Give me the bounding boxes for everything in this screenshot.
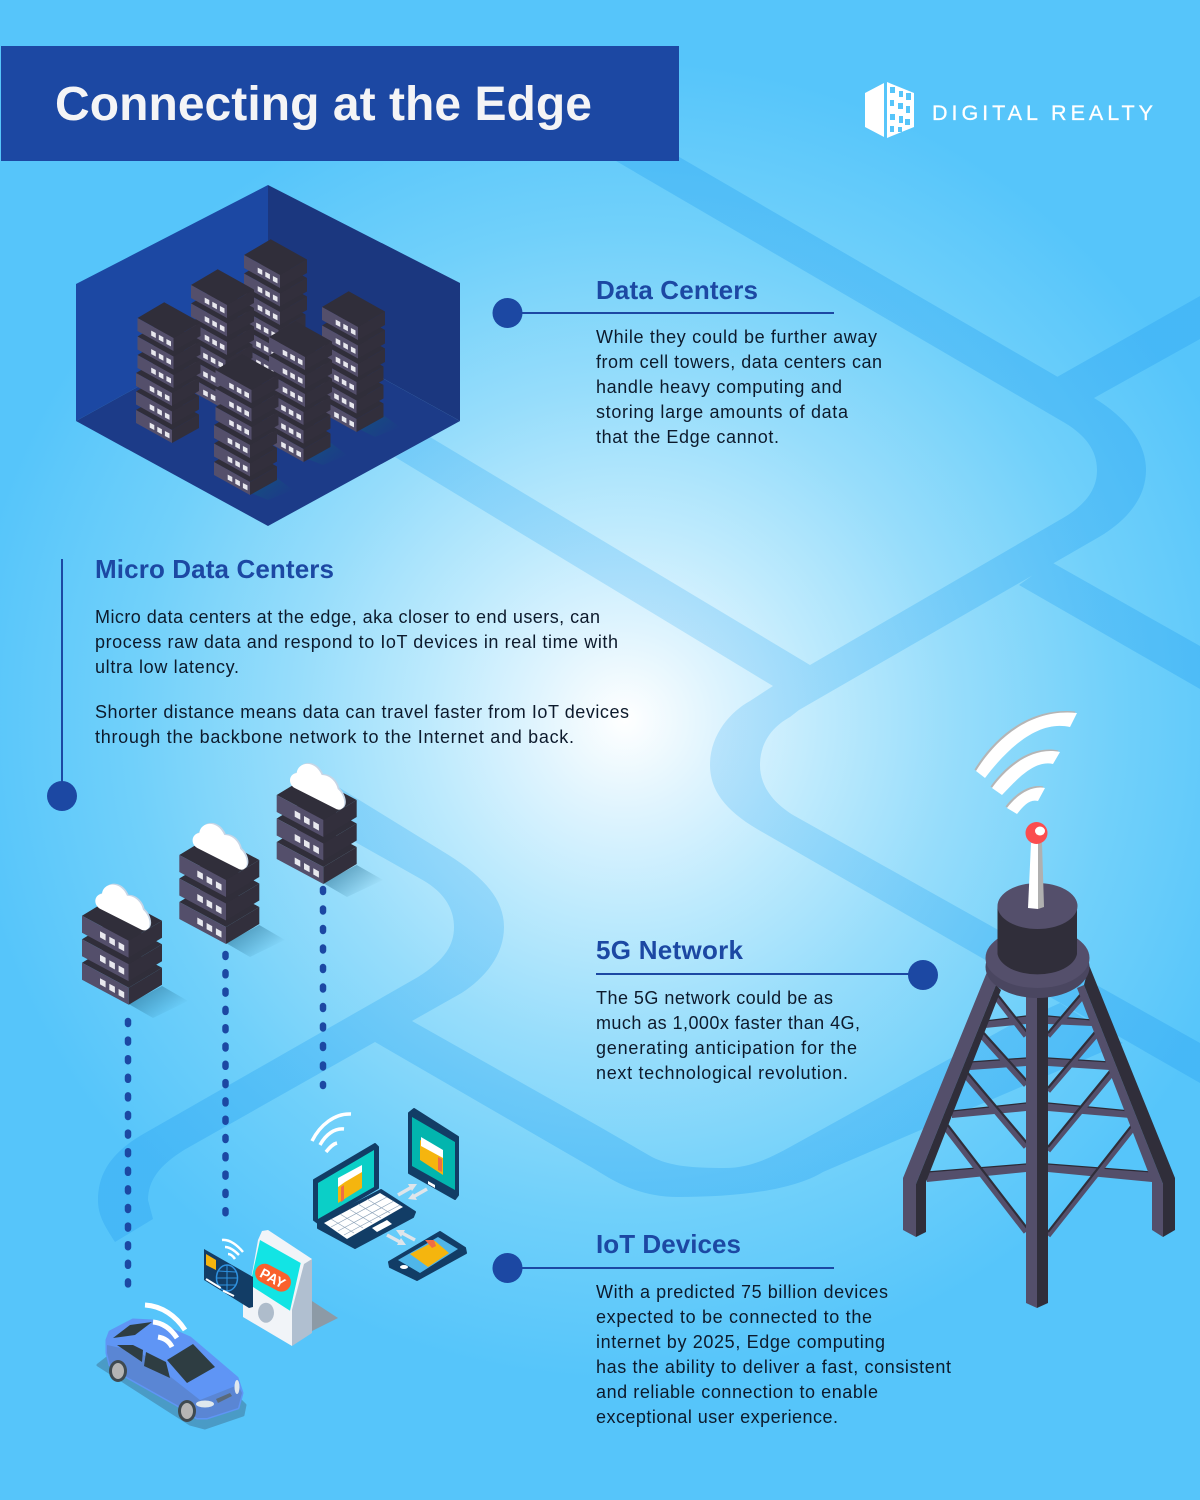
text block: Micro Data Centers [47,554,629,811]
icon: laptop with folder and wifi [312,1114,415,1248]
text block: Data Centers: that the Edge cannot. [596,427,779,447]
text block: IoT Devices: With a predicted 75 billion devices [596,1282,888,1302]
text block: IoT Devices: expected to be connected to the [596,1307,872,1327]
icon: payment kiosk: PAY [257,1265,289,1292]
icon: tablet with folder [409,1109,458,1199]
text block: Micro Data Centers: ultra low latency. [95,657,239,677]
text block: 5G Network: 5G Network [596,935,744,965]
micro server 3 with cloud [277,763,383,897]
server stack: back centre [242,239,307,380]
text block: Data Centers: Data Centers [596,275,758,305]
5G tower [903,711,1175,1308]
server stack: centre right [268,321,332,462]
text block: 5G Network: generating anticipation for the [596,1038,857,1058]
icon: connected car [98,1305,245,1428]
text block: IoT Devices: and reliable connection to enable [596,1382,878,1402]
background network roads [98,140,1200,1242]
text block: Micro Data Centers: Shorter distance means data can travel faster from IoT devices [95,702,629,722]
text block: Data Centers: While they could be further away [596,327,877,347]
text block: IoT Devices: internet by 2025, Edge computing [596,1332,885,1352]
text block: IoT Devices: has the ability to deliver a fast, consistent [596,1357,951,1377]
icon: smartphone with folder [389,1232,466,1280]
icon: credit card with wifi [204,1240,253,1308]
text block: IoT Devices: IoT Devices [596,1229,741,1259]
micro server 1 with cloud [82,884,188,1018]
text block: Micro Data Centers: process raw data and respond to IoT devices in real time with [95,632,618,652]
text block: 5G Network: next technological revolution. [596,1063,848,1083]
text block: Data Centers: handle heavy computing and [596,377,842,397]
text block: Micro Data Centers: Micro Data Centers [95,554,334,584]
arrows between devices [387,1184,427,1245]
text block: Data Centers: storing large amounts of data [596,402,849,422]
Digital Realty logo: DIGITAL REALTY [932,101,1153,125]
dotted connection lines [128,889,323,1286]
wifi signal arcs [974,711,1077,814]
icon: payment kiosk [243,1230,338,1346]
data center room with server stacks [76,185,460,526]
micro server 2 with cloud [179,823,285,957]
server stack: back left [190,269,254,410]
server stack: front [214,354,278,495]
text block: Data Centers: from cell towers, data centers can [596,352,882,372]
server stack: left [136,302,200,443]
tower legs [903,965,1175,1308]
text block: 5G Network: The 5G network could be as [596,988,833,1008]
title banner: Connecting at the Edge [55,78,592,131]
tower platform [986,883,1090,998]
server stack: right [320,291,385,432]
text block: Micro Data Centers: Micro data centers at the edge, aka closer to end users, can [95,607,600,627]
text block: IoT Devices: exceptional user experience. [596,1407,838,1427]
tower braces [927,994,1152,1236]
text block: Micro Data Centers: through the backbone network to the Internet and back. [95,727,574,747]
text block: IoT Devices [492,1229,951,1427]
text block: 5G Network: much as 1,000x faster than 4G, [596,1013,860,1033]
text block: Data Centers [492,275,882,447]
antenna [1026,822,1048,909]
title banner [1,46,679,161]
text block: 5G Network [596,935,938,1083]
Digital Realty logo [865,82,1153,138]
